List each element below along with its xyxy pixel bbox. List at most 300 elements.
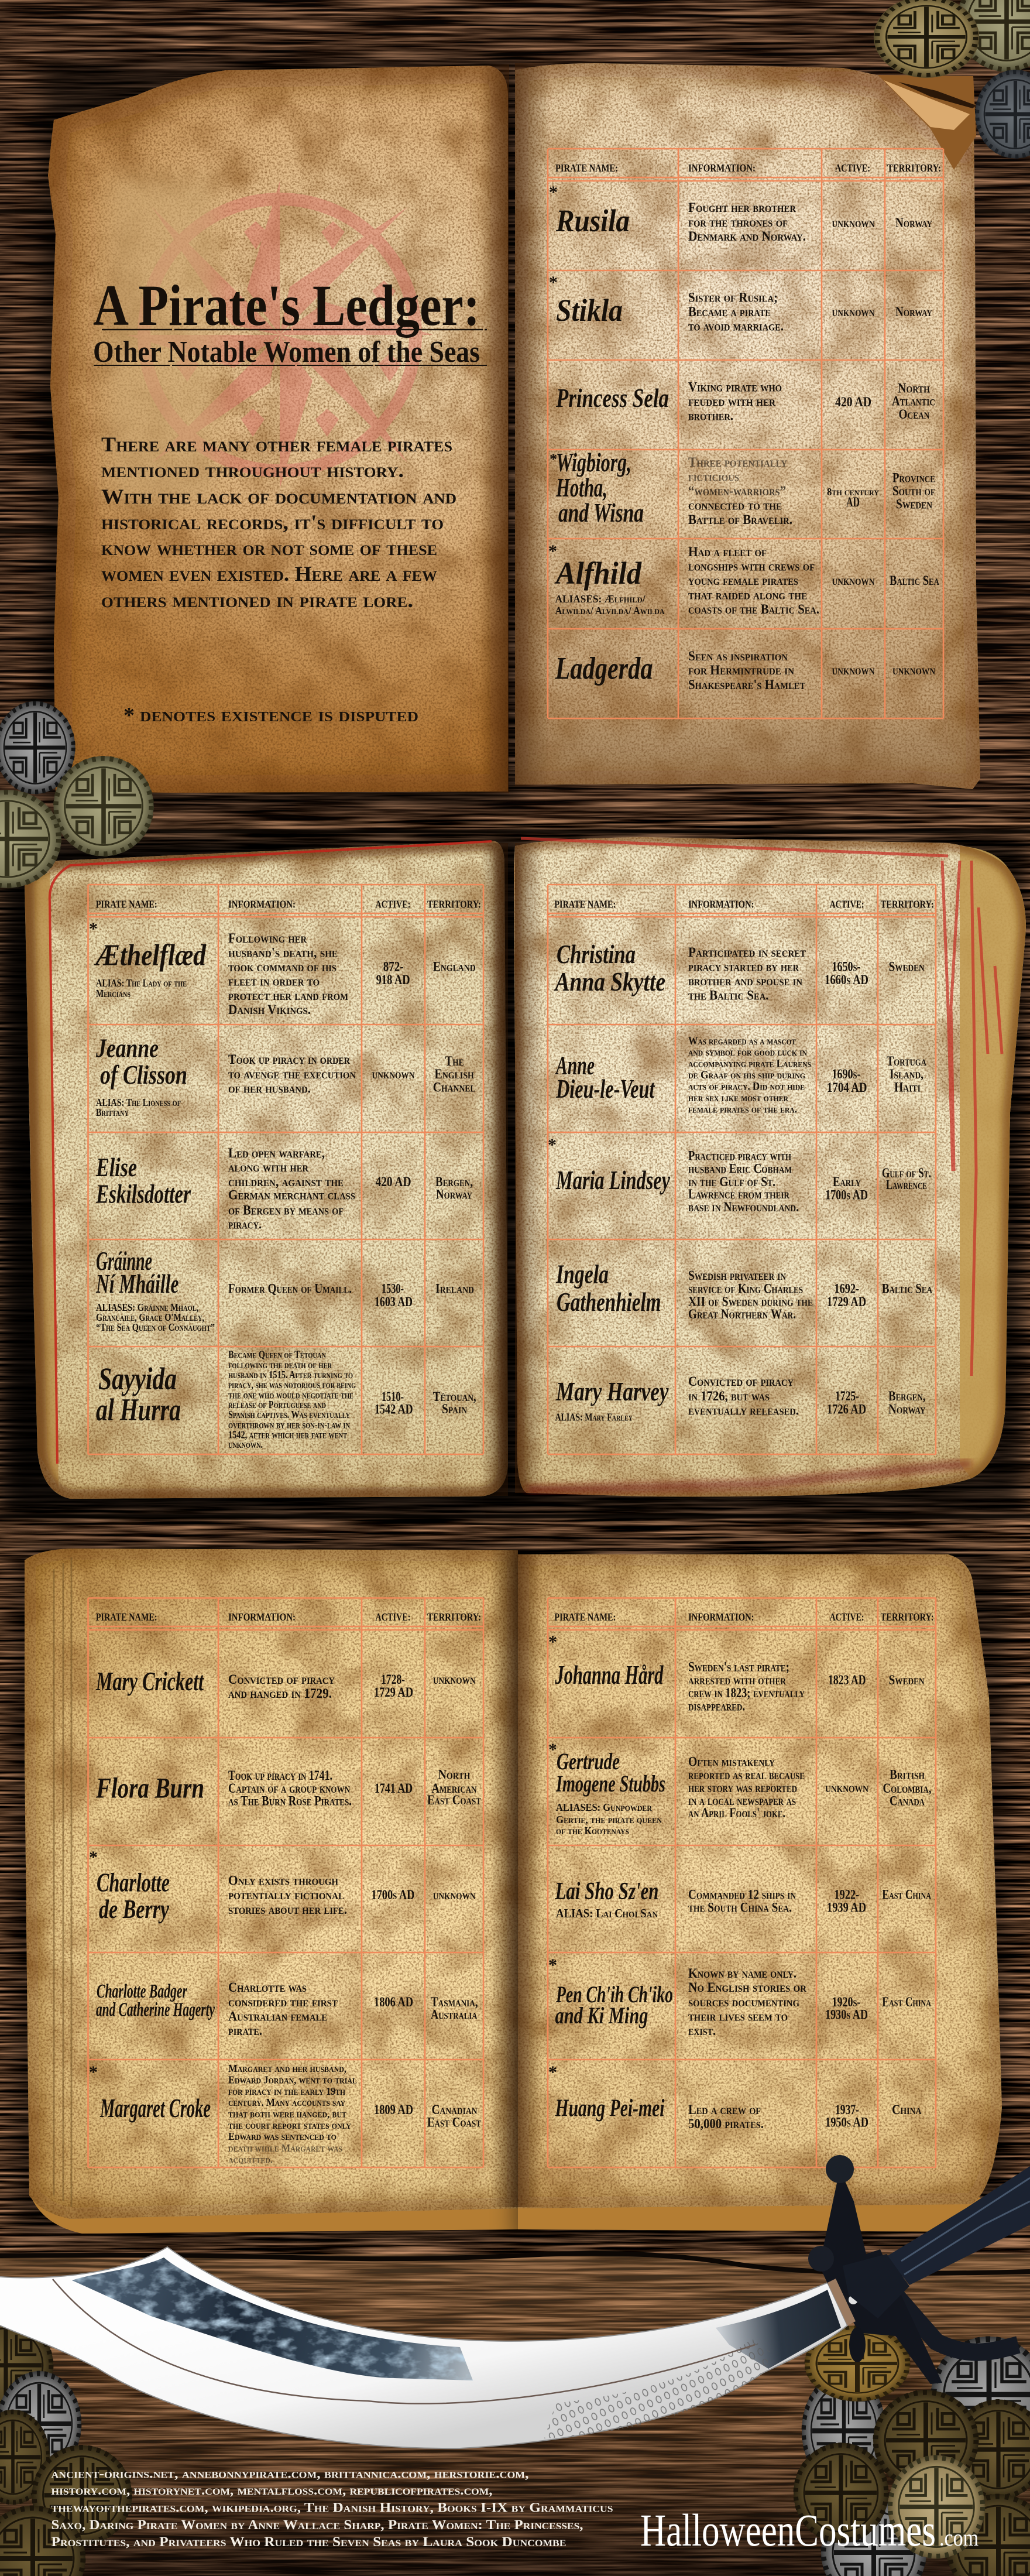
row: Rusila: Norway — [895, 215, 932, 230]
row: Stikla: Sister of Rusila; — [688, 290, 778, 304]
row: Christina Anna Skytte: Anna Skytte — [554, 967, 665, 996]
row: Charlotte de Berry: 1700s AD — [371, 1888, 414, 1902]
compass faded left side — [105, 176, 217, 503]
row: Grainne Ni Mhaille: 1603 AD — [375, 1294, 413, 1309]
row: Jeanne of Clisson: unknown — [372, 1067, 415, 1081]
row: Gertrude Imogene Stubbs: Often mistakenly — [688, 1755, 775, 1769]
row: Alfhild: * — [548, 542, 557, 561]
row: Alfhild: that raided along the — [688, 588, 807, 602]
row: Flora Burn: as The Burn Rose Pirates. — [228, 1794, 352, 1808]
row: Jeanne of Clisson: Took up piracy in order — [228, 1052, 350, 1067]
row: Aethelflaed: ALIAS: The Lady of the — [96, 977, 187, 989]
row: Anne Dieu-le-Veut: her sex like most other — [688, 1092, 789, 1104]
header row: ACTIVE: — [830, 1611, 864, 1623]
row: Lai Sho Sz'en — [555, 1878, 931, 1920]
row: Charlotte de Berry: potentially fictional — [228, 1888, 344, 1902]
row: Gertrude Imogene Stubbs: of the Kootenays — [556, 1825, 629, 1837]
row: Maria Lindsey: Maria Lindsey — [555, 1165, 670, 1195]
row: Rusila: Fought her brother — [688, 200, 796, 215]
table grid — [88, 885, 483, 1454]
table: pirates 12-16 — [548, 885, 936, 1454]
header row: INFORMATION: — [228, 898, 296, 910]
row: Grainne Ni Mhaille: Granuaile, Grace O'Malley, — [96, 1311, 204, 1323]
row: Wigbiorg, Hotha, and Wisna: 8th century — [827, 486, 880, 498]
row: Sayyida al Hurra: al Hurra — [96, 1392, 181, 1427]
table: pirates 7-11 — [88, 885, 483, 1454]
row: Sayyida al Hurra — [96, 1349, 476, 1450]
row: Sayyida al Hurra: the one who would negotiate the — [228, 1389, 353, 1400]
table: pirates 1-6 — [548, 149, 943, 718]
row: Princess Sela: North — [898, 381, 930, 396]
row: Anne Dieu-le-Veut: Anne — [555, 1050, 595, 1080]
header row — [554, 898, 934, 910]
row: Anne Dieu-le-Veut: Was regarded as a mascot — [688, 1035, 796, 1047]
header row — [96, 1611, 481, 1623]
row: Anne Dieu-le-Veut: acts of piracy. Did not hide — [688, 1081, 805, 1093]
row: Pen Ch'ih Ch'iko and Ki Ming: Pen Ch'ih Ch'iko — [555, 1981, 673, 2008]
blade bevel line — [53, 2279, 755, 2404]
row: Elise Eskilsdotter: Eskilsdotter — [95, 1179, 191, 1208]
header row: ACTIVE: — [830, 898, 864, 910]
row: Ingela Gathenhielm: XII of Sweden during the — [688, 1294, 813, 1308]
row: Aethelflaed: fleet in order to — [228, 974, 320, 989]
row: Grainne Ni Mhaille: “The Sea Queen of Connaught” — [96, 1321, 215, 1333]
row: Charlotte Badger and Catherine Hagerty: Charlotte was — [228, 1980, 307, 1995]
row: Johanna Hard: crew in 1823; eventually — [688, 1686, 805, 1700]
page stack bottom edge — [29, 2193, 518, 2234]
row: Pen Ch'ih Ch'iko and Ki Ming: * — [548, 1955, 557, 1975]
row: Aethelflaed: Danish Vikings. — [228, 1002, 311, 1017]
row: Wigbiorg, Hotha, and Wisna: “women-warriors” — [688, 484, 786, 498]
row: Anne Dieu-le-Veut: Dieu-le-Veut — [555, 1074, 655, 1104]
row: Wigbiorg, Hotha, and Wisna: Wigbiorg, — [556, 447, 631, 477]
row: Charlotte Badger and Catherine Hagerty: Australian female — [228, 2009, 327, 2024]
row: Charlotte Badger and Catherine Hagerty: Australia — [431, 2008, 478, 2022]
header row: INFORMATION: — [228, 1611, 296, 1623]
header row — [96, 898, 481, 910]
row: Flora Burn: American — [432, 1781, 477, 1796]
row: Christina Anna Skytte: Sweden — [889, 959, 925, 974]
row: Margaret Croke: century. Many accounts say — [228, 2097, 346, 2108]
row: Pen Ch'ih Ch'iko and Ki Ming — [548, 1955, 931, 2038]
icon: coins bottom right — [794, 2325, 1030, 2576]
row: Charlotte de Berry: unknown — [433, 1888, 476, 1902]
row: Jeanne of Clisson: to avenge the execution — [228, 1067, 356, 1081]
row: Ingela Gathenhielm: 1692- — [835, 1282, 859, 1296]
row: Maria Lindsey: husband Eric Cobham — [688, 1162, 792, 1176]
row: Aethelflaed: Mercians — [96, 988, 131, 999]
row: Mary Harvey: Convicted of piracy — [688, 1374, 794, 1389]
row: Margaret Croke: acquitted. — [228, 2153, 273, 2165]
row: Aethelflaed — [89, 919, 476, 1017]
row: Wigbiorg, Hotha, and Wisna — [550, 447, 935, 527]
row: Alfhild: Baltic Sea — [890, 573, 939, 588]
row: Charlotte Badger and Catherine Hagerty: and Catherine Hagerty — [96, 1999, 215, 2021]
row: Anne Dieu-le-Veut: and symbol for good luck in — [688, 1046, 808, 1059]
header row: TERRITORY: — [881, 898, 934, 910]
row: Margaret Croke: for piracy in the early 19th — [228, 2085, 345, 2097]
row: Ingela Gathenhielm: 1729 AD — [827, 1294, 866, 1309]
row: Gertrude Imogene Stubbs: an April Fools' joke. — [688, 1806, 785, 1820]
row: Charlotte de Berry: Charlotte — [97, 1868, 170, 1897]
row: Elise Eskilsdotter: piracy. — [228, 1217, 262, 1232]
row: Flora Burn: Captain of a group known — [228, 1781, 350, 1796]
row: Margaret Croke: Canadian — [432, 2102, 478, 2117]
row: Stikla: Norway — [895, 304, 932, 319]
row: Sayyida al Hurra: Tétouan, — [433, 1389, 476, 1404]
row: Rusila: Rusila — [555, 203, 630, 238]
row: Ingela Gathenhielm — [555, 1259, 932, 1321]
header row — [554, 1611, 934, 1623]
title: A Pirate's Ledger: — [93, 273, 480, 338]
subtitle underline — [94, 365, 487, 366]
row: Maria Lindsey: 1700s AD — [825, 1188, 868, 1203]
panel: book 2 left page — [0, 837, 521, 1516]
table: pirates 22-26 — [548, 1598, 936, 2167]
row: Christina Anna Skytte: piracy started by her — [688, 959, 799, 974]
row: Ladgerda — [555, 649, 935, 692]
row: Ingela Gathenhielm: Swedish privateer in — [688, 1268, 786, 1283]
blade engraving — [544, 2339, 772, 2438]
row: Elise Eskilsdotter: Norway — [436, 1187, 472, 1202]
header row: PIRATE NAME: — [96, 1611, 157, 1623]
row: Stikla: to avoid marriage. — [688, 318, 784, 334]
row: Princess Sela: Atlantic — [892, 394, 935, 409]
row: Margaret Croke: * — [89, 2063, 98, 2082]
row: Charlotte Badger and Catherine Hagerty: Charlotte Badger — [97, 1981, 187, 2002]
red page edge streaks — [521, 838, 1002, 1376]
row: Wigbiorg, Hotha, and Wisna: South of — [892, 484, 935, 498]
row: Elise Eskilsdotter: 420 AD — [376, 1174, 411, 1189]
row: Jeanne of Clisson: The — [445, 1054, 464, 1068]
row: Sayyida al Hurra: Sayyida — [98, 1361, 177, 1396]
row: Christina Anna Skytte: 1660s AD — [825, 972, 868, 987]
row: Sayyida al Hurra: piracy, she was notorious for being — [228, 1379, 356, 1390]
row: Lai Sho Sz'en: ALIAS: Lai Choi San — [556, 1906, 658, 1920]
row: Grainne Ni Mhaille: Ireland — [435, 1282, 474, 1296]
intro paragraph: women even existed. Here are a few — [101, 562, 437, 585]
row: Anne Dieu-le-Veut: de Graaf on his ship during — [688, 1069, 805, 1081]
row: Maria Lindsey: in the Gulf of St. — [688, 1174, 775, 1189]
row: Anne Dieu-le-Veut — [555, 1035, 926, 1115]
row: Margaret Croke: Margaret Croke — [99, 2093, 211, 2123]
sources — [52, 2467, 613, 2549]
row: Sayyida al Hurra: 1542 AD — [375, 1402, 413, 1417]
row: Aethelflaed: took command of his — [228, 960, 337, 974]
row: Maria Lindsey: Practiced piracy with — [688, 1149, 791, 1163]
row: Aethelflaed: 872- — [383, 959, 404, 974]
row: Grainne Ni Mhaille: Ní Mháille — [95, 1269, 179, 1299]
row: Ingela Gathenhielm: Baltic Sea — [882, 1282, 932, 1296]
header row: TERRITORY: — [881, 1611, 934, 1623]
row: Jeanne of Clisson: Channel — [433, 1080, 476, 1094]
panel: book 1 left page with title — [41, 61, 521, 805]
row: Rusila: for the thrones of — [688, 215, 788, 229]
panel: book 2 right page — [509, 837, 1026, 1516]
row: Jeanne of Clisson — [95, 1033, 476, 1118]
row: Johanna Hard: * — [548, 1632, 557, 1652]
row: Alfhild: Had a fleet of — [688, 544, 767, 559]
row: Elise Eskilsdotter: German merchant class — [228, 1188, 355, 1203]
header row: TERRITORY: — [887, 162, 941, 174]
row: Wigbiorg, Hotha, and Wisna: * — [550, 451, 557, 468]
row: Margaret Croke — [89, 2063, 481, 2165]
row: Alfhild: ALIASES: Ælfhild/ — [555, 593, 646, 605]
row: Elise Eskilsdotter: Elise — [95, 1152, 137, 1182]
icon: coins bottom left — [0, 2318, 132, 2576]
row: Flora Burn: North — [438, 1767, 471, 1782]
row: Christina Anna Skytte — [554, 939, 925, 1002]
intro paragraph: With the lack of documentation and — [101, 485, 456, 508]
row: Ladgerda: unknown — [892, 663, 935, 677]
page stack bottom edge — [518, 2195, 995, 2232]
row: Gertrude Imogene Stubbs: ALIASES: Gunpowder — [556, 1801, 653, 1813]
row: Anne Dieu-le-Veut: Island, — [890, 1067, 923, 1081]
row: Gertrude Imogene Stubbs: British — [890, 1767, 925, 1782]
row: Flora Burn: Flora Burn — [95, 1772, 204, 1804]
row: Lai Sho Sz'en: the South China Sea. — [688, 1900, 792, 1914]
row: Margaret Croke: Margaret and her husband, — [228, 2063, 346, 2074]
row: Mary Crickett: 1728- — [381, 1672, 405, 1687]
row: Christina Anna Skytte: the Baltic Sea. — [688, 988, 769, 1002]
row: Huang Pei-mei: 50,000 pirates. — [688, 2116, 764, 2131]
row: Charlotte Badger and Catherine Hagerty — [96, 1980, 478, 2038]
row: Gertrude Imogene Stubbs: Imogene Stubbs — [555, 1770, 665, 1797]
row: Jeanne of Clisson: ALIAS: The Lioness of — [96, 1097, 181, 1108]
row: Alfhild: unknown — [832, 573, 875, 588]
row: Sayyida al Hurra: 1510- — [382, 1389, 404, 1404]
row: Lai Sho Sz'en: 1939 AD — [827, 1900, 866, 1914]
row: Lai Sho Sz'en: 1922- — [835, 1888, 859, 1902]
row: Charlotte de Berry — [89, 1848, 476, 1924]
row: Grainne Ni Mhaille: Former Queen of Umaill. — [228, 1282, 352, 1296]
row: Charlotte de Berry: Only exists through — [228, 1873, 339, 1888]
row: Sayyida al Hurra: Became Queen of Tétouan — [228, 1349, 326, 1361]
row: Grainne Ni Mhaille: Gráinne — [96, 1246, 152, 1276]
row: Christina Anna Skytte: Participated in secret — [688, 945, 806, 960]
row: Princess Sela — [555, 380, 935, 423]
row: Mary Crickett — [95, 1666, 476, 1701]
row: Mary Harvey — [555, 1374, 926, 1423]
row: Stikla: * — [549, 273, 558, 292]
row: Gertrude Imogene Stubbs: Colombia, — [883, 1781, 932, 1796]
sources: Prostitutes, and Privateers Who Ruled the Seven Seas by Laura Sook Duncombe — [52, 2534, 566, 2549]
row: Alfhild: longships with crews of — [688, 559, 815, 574]
header row: TERRITORY: — [427, 898, 481, 910]
row: Pen Ch'ih Ch'iko and Ki Ming: sources documenting — [688, 1995, 800, 2009]
row: Ingela Gathenhielm: Great Northern War. — [688, 1307, 796, 1321]
row: Johanna Hard: disappeared. — [688, 1699, 745, 1713]
row: Pen Ch'ih Ch'iko and Ki Ming: their lives seem to — [688, 2009, 788, 2024]
sources: ancient-origins.net, annebonnypirate.com, brittannica.com, herstorie.com, — [52, 2467, 528, 2481]
row: Pen Ch'ih Ch'iko and Ki Ming: Known by name only. — [688, 1966, 796, 1981]
row: Flora Burn: Took up piracy in 1741. — [228, 1768, 332, 1783]
row: Charlotte Badger and Catherine Hagerty: Tasmania, — [431, 1995, 478, 2009]
row: Aethelflaed: protect her land from — [228, 988, 348, 1003]
table grid — [548, 149, 943, 718]
row: Mary Crickett: Convicted of piracy — [228, 1672, 335, 1687]
header row: PIRATE NAME: — [554, 1611, 616, 1623]
row: Aethelflaed: Æthelflæd — [94, 939, 207, 972]
row: Anne Dieu-le-Veut: female pirates of the era. — [688, 1103, 797, 1115]
subtitle: Other Notable Women of the Seas — [93, 335, 480, 369]
row: Sayyida al Hurra: release of Portuguese and — [228, 1399, 326, 1410]
row: Sayyida al Hurra: unknown. — [228, 1438, 263, 1450]
row: Gertrude Imogene Stubbs: * — [548, 1740, 557, 1759]
table grid — [88, 1598, 483, 2167]
row: Jeanne of Clisson: English — [434, 1067, 474, 1081]
row: Charlotte de Berry: stories about her life. — [228, 1902, 347, 1917]
intro paragraph: historical records, it's difficult to — [101, 511, 444, 534]
row: Rusila: * — [549, 183, 558, 202]
row: Aethelflaed: husband's death, she — [228, 946, 338, 960]
intro paragraph: know whether or not some of these — [101, 536, 437, 560]
sword hilt — [808, 2155, 1030, 2384]
row: Johanna Hard: arrested with other — [688, 1673, 786, 1687]
row: Huang Pei-mei — [548, 2063, 922, 2131]
row: Sayyida al Hurra: 1542, after which her fate went — [228, 1429, 347, 1441]
row: Grainne Ni Mhaille — [95, 1246, 474, 1333]
row: Mary Crickett: 1729 AD — [374, 1685, 413, 1700]
row: Huang Pei-mei: 1937- — [835, 2102, 859, 2117]
row: Alfhild: young female pirates — [688, 573, 798, 588]
row: Princess Sela: 420 AD — [835, 395, 871, 409]
row: Sayyida al Hurra: husband in 1515. After turning to — [228, 1369, 353, 1381]
row: Ladgerda: for Hermintrude in — [688, 663, 794, 677]
row: Huang Pei-mei: China — [892, 2102, 922, 2117]
row: Pen Ch'ih Ch'iko and Ki Ming: exist. — [688, 2023, 716, 2038]
sources: thewayofthepirates.com, wikipedia.org, The Danish History, Books I-IX by Grammaticus — [52, 2500, 613, 2515]
row: Grainne Ni Mhaille: 1530- — [382, 1282, 404, 1296]
row: Aethelflaed: England — [433, 959, 476, 974]
row: Gertrude Imogene Stubbs: Canada — [890, 1794, 925, 1808]
row: Alfhild: coasts of the Baltic Sea. — [688, 602, 819, 616]
icon: coins left between books — [0, 701, 154, 888]
row: Jeanne of Clisson: of her husband. — [228, 1081, 311, 1095]
row: Mary Harvey: eventually released. — [688, 1403, 799, 1417]
row: Maria Lindsey: base in Newfoundland. — [688, 1200, 799, 1214]
intro paragraph — [101, 433, 456, 612]
row: Johanna Hard — [548, 1632, 925, 1713]
row: Huang Pei-mei: Huang Pei-mei — [555, 2095, 665, 2122]
compass rose — [126, 181, 433, 488]
header row: INFORMATION: — [688, 898, 754, 910]
row: Huang Pei-mei: 1950s AD — [825, 2115, 868, 2130]
row: Pen Ch'ih Ch'iko and Ki Ming: No English stories or — [688, 1980, 806, 1995]
row: Charlotte de Berry: * — [89, 1848, 98, 1867]
row: Huang Pei-mei: * — [548, 2063, 557, 2082]
intro paragraph: others mentioned in pirate lore. — [101, 588, 413, 612]
row: Pen Ch'ih Ch'iko and Ki Ming: East China — [882, 1995, 931, 2009]
blade dark near hilt — [716, 2290, 841, 2369]
row: Maria Lindsey: Early — [833, 1174, 861, 1189]
row: Princess Sela: feuded with her — [688, 394, 775, 409]
row: Charlotte de Berry: de Berry — [99, 1894, 169, 1924]
header row: INFORMATION: — [688, 1611, 754, 1623]
row: Princess Sela: Viking pirate who — [688, 380, 782, 395]
row: Sayyida al Hurra: Spain — [442, 1402, 467, 1416]
row: Pen Ch'ih Ch'iko and Ki Ming: 1920s- — [832, 1995, 860, 2009]
row: Ingela Gathenhielm: Ingela — [555, 1259, 609, 1289]
row: Mary Harvey: Mary Harvey — [555, 1376, 669, 1406]
row: Gertrude Imogene Stubbs: in a local newspaper as — [688, 1793, 796, 1808]
row: Ladgerda: Seen as inspiration — [688, 649, 788, 663]
row: Mary Harvey: Norway — [888, 1402, 926, 1416]
footnote: denotes existence is disputed — [140, 704, 418, 726]
row: Anne Dieu-le-Veut: accompanying pirate Laurens — [688, 1057, 811, 1070]
row: Elise Eskilsdotter — [95, 1146, 473, 1232]
intro paragraph: mentioned throughout history. — [101, 458, 404, 482]
row: Margaret Croke: 1809 AD — [374, 2102, 413, 2117]
row: Elise Eskilsdotter: Bergen, — [435, 1174, 473, 1189]
row: Mary Crickett: and hanged in 1729. — [228, 1686, 332, 1701]
row: Charlotte Badger and Catherine Hagerty: pirate. — [228, 2023, 262, 2038]
logo: HalloweenCostumes.com: HalloweenCostumes — [640, 2505, 936, 2556]
row: Johanna Hard: Johanna Hård — [555, 1660, 664, 1690]
row: Ingela Gathenhielm: service of King Charles — [688, 1282, 803, 1296]
row: Mary Harvey: in 1726, but was — [688, 1389, 770, 1403]
row: Wigbiorg, Hotha, and Wisna: Sweden — [896, 497, 932, 512]
row: Mary Harvey: 1726 AD — [827, 1402, 866, 1416]
row: Gertrude Imogene Stubbs: her story was reported — [688, 1780, 797, 1795]
row: Wigbiorg, Hotha, and Wisna: Three potentially — [688, 455, 787, 470]
sword blade — [0, 2247, 847, 2448]
row: Sayyida al Hurra: following the death of her — [228, 1359, 332, 1371]
row: Margaret Croke: that both were hanged, but — [228, 2108, 346, 2120]
table: pirates 17-21 — [88, 1598, 483, 2167]
header row: PIRATE NAME: — [96, 898, 157, 910]
row: Maria Lindsey: Gulf of St. — [882, 1166, 931, 1180]
row: Rusila: unknown — [832, 215, 875, 230]
row: Elise Eskilsdotter: children, against the — [228, 1174, 344, 1189]
title underline — [102, 329, 487, 330]
header row: ACTIVE: — [376, 898, 411, 910]
table grid — [548, 1598, 936, 2167]
header row: INFORMATION: — [688, 162, 756, 174]
header row: ACTIVE: — [376, 1611, 411, 1623]
row: Margaret Croke: death while Margaret was — [228, 2142, 342, 2154]
header row: PIRATE NAME: — [554, 898, 616, 910]
row: Christina Anna Skytte: Christina — [557, 939, 636, 969]
row: Maria Lindsey: Lawrence from their — [688, 1187, 789, 1201]
row: Pen Ch'ih Ch'iko and Ki Ming: and Ki Ming — [555, 2002, 648, 2029]
row: Anne Dieu-le-Veut: Haiti — [894, 1080, 921, 1094]
row: Ladgerda: unknown — [832, 663, 875, 677]
row: Princess Sela: brother. — [688, 409, 733, 423]
row: Grainne Ni Mhaille: ALIASES: Gráinne Mhaol, — [96, 1301, 199, 1313]
icon: cutlass sword — [0, 2155, 1030, 2448]
row: Johanna Hard: Sweden's last pirate; — [688, 1659, 789, 1674]
table grid — [548, 885, 936, 1454]
row: Princess Sela: Ocean — [899, 407, 930, 422]
row: Lai Sho Sz'en: Lai Sho Sz'en — [555, 1878, 659, 1905]
row: Margaret Croke: Edward Jordan, went to trial — [228, 2074, 357, 2085]
intro paragraph: There are many other female pirates — [101, 433, 452, 456]
row: Alfhild: Alwilda/ Alvilda/ Awilda — [555, 605, 665, 616]
row: Lai Sho Sz'en: East China — [882, 1888, 931, 1902]
header row: ACTIVE: — [835, 162, 870, 174]
row: Alfhild — [548, 542, 939, 616]
row: Wigbiorg, Hotha, and Wisna: and Wisna — [558, 498, 644, 527]
panel: book 3 right page — [515, 1546, 1007, 2242]
row: Mary Crickett: Mary Crickett — [95, 1666, 204, 1696]
header row: PIRATE NAME: — [555, 162, 618, 174]
row: Christina Anna Skytte: brother and spouse in — [688, 974, 802, 988]
row: Mary Harvey: 1725- — [835, 1389, 859, 1403]
row: Ladgerda: Ladgerda — [555, 651, 653, 686]
row: Maria Lindsey: Lawrence — [886, 1177, 927, 1192]
row: Johanna Hard: Sweden — [889, 1673, 925, 1687]
